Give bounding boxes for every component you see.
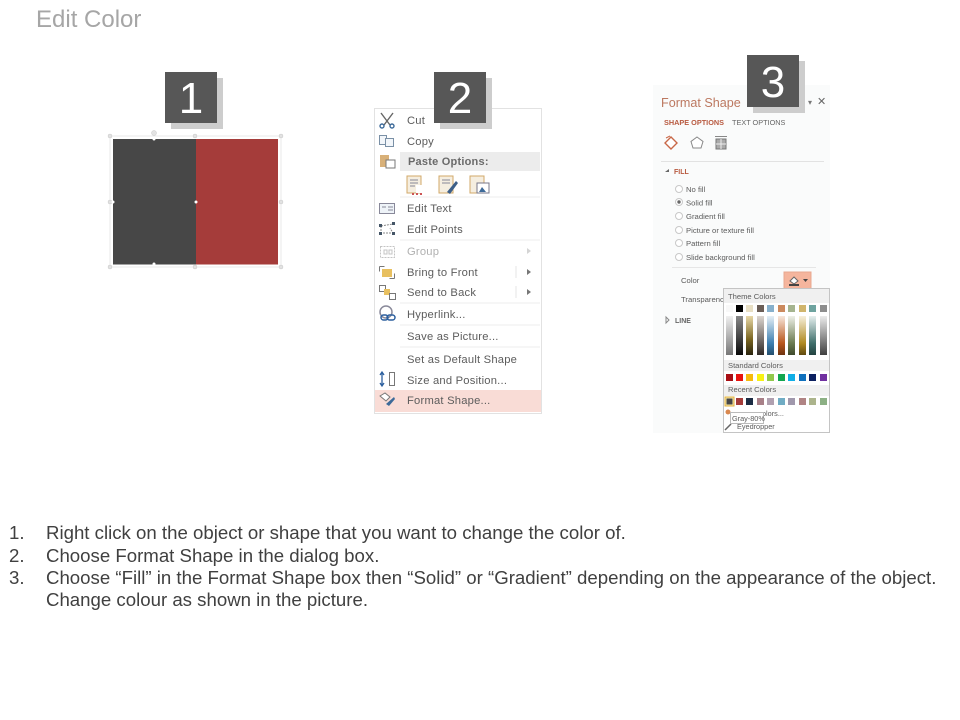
panel: step 3 format shape pane: TEXT OPTIONS (732, 118, 786, 127)
fill radio options: No fill (686, 185, 706, 194)
pane controls: ▾ (808, 98, 812, 107)
color row: Color (681, 276, 700, 285)
standard colors row (726, 374, 827, 381)
menu labels: Format Shape... (407, 395, 491, 407)
number badge 3 (747, 55, 805, 113)
menu labels: Group (407, 246, 439, 258)
number badge 2 (434, 72, 492, 129)
red half of shape (196, 139, 278, 264)
menu labels: Save as Picture... (407, 331, 499, 343)
color picker popup: Standard Colors (728, 361, 783, 370)
line section label (666, 317, 691, 325)
menu arrows (527, 248, 531, 295)
icon: bring to front (380, 266, 394, 278)
fill section label (665, 169, 689, 176)
icon: hyperlink (380, 306, 395, 320)
transparency label: Transparency (681, 295, 728, 304)
icon: pentagon (691, 137, 703, 148)
icon: paste (380, 155, 395, 168)
number badge 1: 1 (179, 74, 203, 123)
icons: paste option buttons (407, 176, 489, 194)
panel: step 1 shape with selection (108, 130, 283, 269)
icon: copy (380, 136, 394, 146)
recent colors row (725, 397, 827, 406)
tabs: SHAPE OPTIONS (664, 118, 724, 127)
panel: step 2 context menu (374, 108, 542, 414)
icon: send to back (380, 286, 396, 300)
theme color top row (726, 305, 827, 312)
text: Change colour as shown in the picture. (46, 589, 368, 610)
fill radio options: Gradient fill (686, 212, 725, 221)
color picker popup: Theme Colors (728, 292, 776, 301)
color row (681, 272, 811, 289)
number badge 2: 2 (448, 74, 472, 123)
text: 1. (9, 522, 25, 543)
icon: scissors (380, 113, 394, 128)
text: Right click on the object or shape that you want to change the color of. (46, 522, 626, 543)
icon: fill bucket (665, 136, 677, 149)
text: 2. (9, 545, 25, 566)
icon: layout (715, 136, 727, 149)
text: 3. (9, 567, 25, 588)
fill radio options: Solid fill (686, 198, 713, 208)
panel: step 3 format shape pane (653, 85, 830, 433)
more colors and eyedropper: Eyedropper (737, 422, 775, 431)
icon: edit text (380, 204, 394, 214)
menu labels: Copy (407, 136, 434, 148)
more colors and eyedropper (725, 409, 784, 431)
text: Choose “Fill” in the Format Shape box then “Solid” or “Gradient” depending on the appearance of the object. (46, 567, 936, 588)
fill radio options (676, 185, 755, 262)
icon: format shape (380, 393, 395, 406)
format shape highlight (375, 390, 541, 412)
icon: size and position (380, 372, 394, 386)
menu labels: Edit Points (407, 224, 463, 236)
icon: group (380, 246, 394, 258)
line section label: LINE (675, 318, 691, 325)
icon: edit points (379, 222, 395, 235)
menu labels: Hyperlink... (407, 309, 466, 321)
theme color gradient columns (726, 316, 827, 355)
tooltip: Gray-80% (732, 414, 765, 423)
menu labels: Paste Options: (408, 156, 489, 168)
panel: step 3 format shape pane: ✕ (817, 96, 826, 108)
number badge 3: 3 (761, 58, 785, 107)
menu labels: Set as Default Shape (407, 354, 517, 366)
menu labels: Cut (407, 115, 426, 127)
menu labels: Size and Position... (407, 375, 507, 387)
color picker popup: Recent Colors (728, 385, 776, 394)
fill radio options: Pattern fill (686, 239, 720, 248)
fill section label: FILL (674, 169, 689, 176)
color picker popup (724, 288, 830, 432)
number badge 1 (165, 72, 223, 129)
fill radio options: Slide background fill (686, 253, 755, 262)
instruction list (9, 522, 936, 610)
title: Edit Color (36, 6, 141, 33)
menu labels: Edit Text (407, 203, 452, 215)
paste options highlight (400, 152, 540, 171)
menu labels (407, 115, 517, 407)
dark half of shape (113, 139, 196, 264)
menu labels: Send to Back (407, 287, 476, 299)
text: Choose Format Shape in the dialog box. (46, 545, 379, 566)
menu labels: Bring to Front (407, 267, 479, 279)
pane title: Format Shape (661, 96, 741, 110)
fill radio options: Picture or texture fill (686, 226, 754, 235)
more colors and eyedropper: olors... (762, 409, 784, 418)
